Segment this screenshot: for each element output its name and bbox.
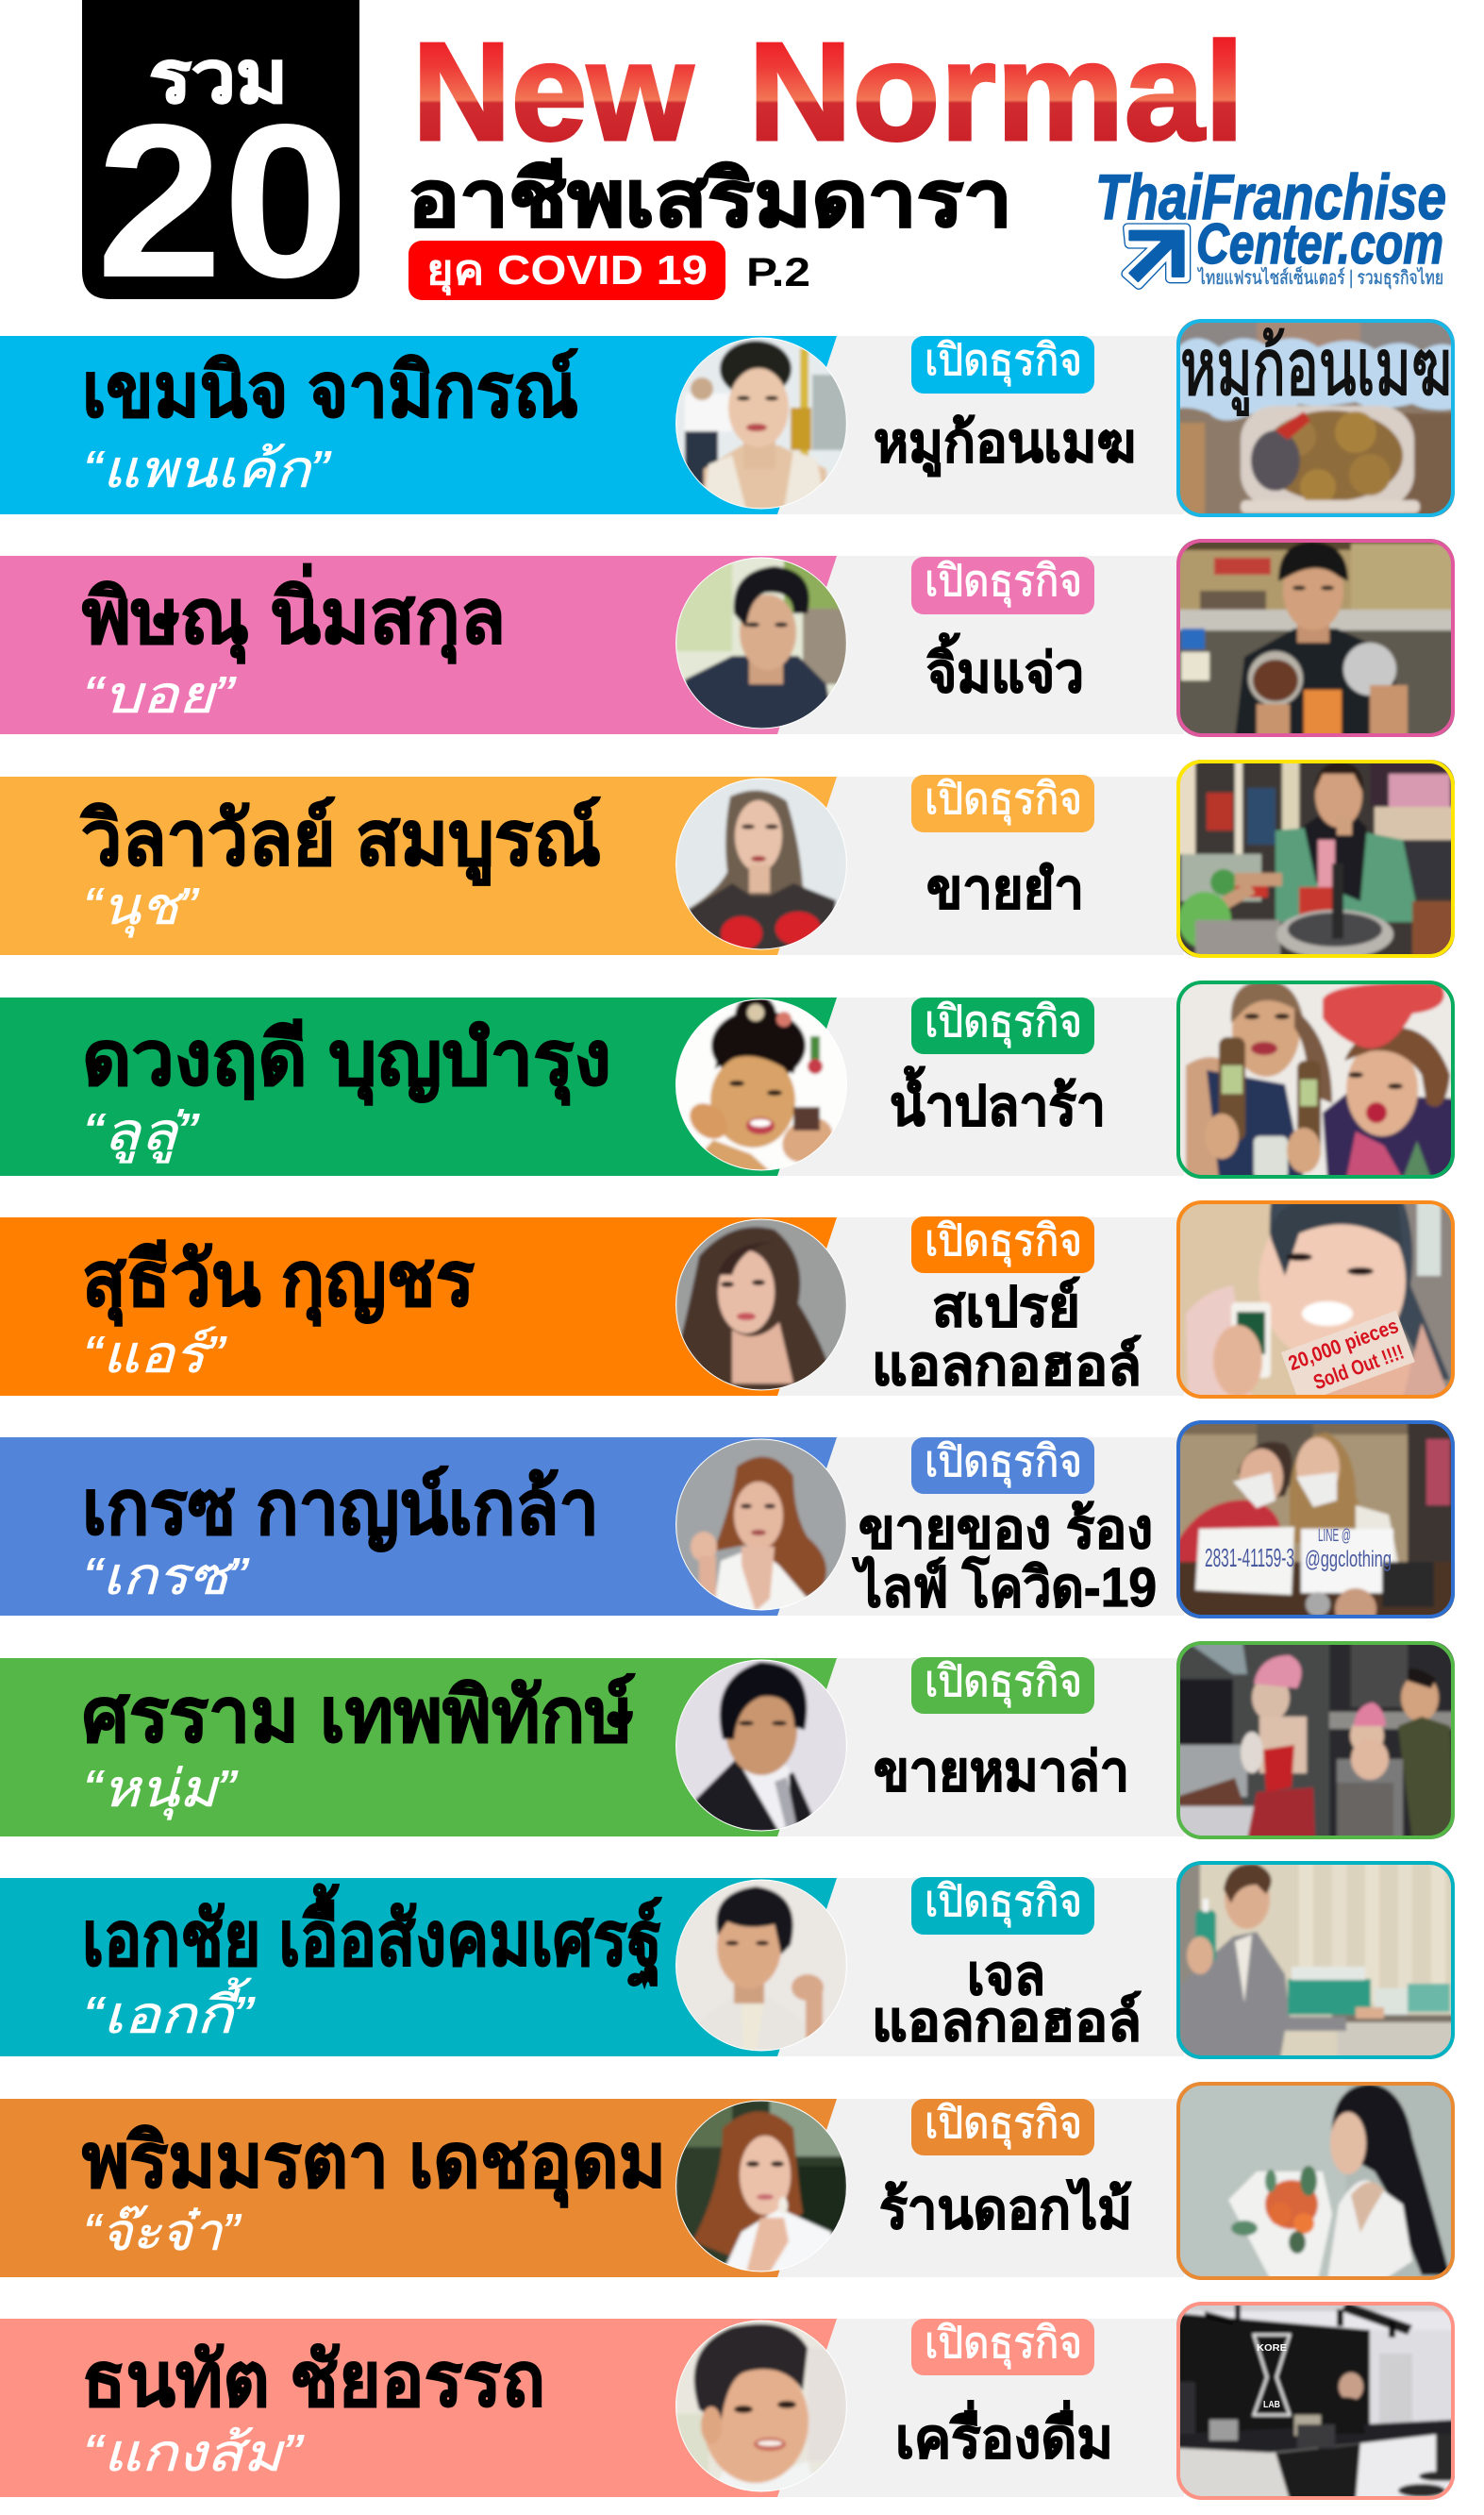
name: เกรซ กาญน์เกล้า [82,1466,599,1551]
portrait [675,1438,847,1611]
title: New Normal: Normal [748,14,1244,170]
nickname: “เกรซ” [83,1547,250,1605]
business: ไลฟ์ โควิด-19 [851,1554,1157,1618]
tag: ยุค COVID 19 [409,241,725,300]
banner [0,336,1184,514]
business: แอลกอฮอล์ [872,1990,1142,2053]
business: สเปรย์ [932,1276,1080,1338]
portrait [675,1879,847,2052]
row 1: แพนเค้ก [0,319,1455,517]
business: น้ำปลาร้า [890,1066,1106,1137]
name: เขมนิจ จามิกรณ์ [82,348,578,432]
nickname: “แกงส้ม” [83,2423,305,2482]
row 10: แกงส้ม [0,2302,1455,2500]
business: ร้านดอกไม้ [879,2178,1132,2240]
row 8: เอกกี้ [0,1861,1455,2059]
photo [1176,760,1455,959]
tag: เปิดธุรกิจ [925,1656,1082,1708]
banner [0,998,1184,1176]
count badge: รวม 20: 20 [96,79,349,324]
photo: LAB [1263,2400,1280,2410]
business [872,1276,1142,1397]
business: ขายยำ [926,859,1084,920]
portrait [675,1218,847,1391]
row 3: นุช [0,760,1455,959]
tag: เปิดธุรกิจ [925,774,1082,826]
photo [1176,2302,1455,2500]
name: ธนทัต ชัยอรรถ [82,2338,545,2422]
tag: เปิดธุรกิจ [925,2318,1082,2370]
nickname: “แอร์” [83,1325,227,1383]
row 7: หนุ่ม [0,1641,1455,1839]
nickname: “แพนเค้ก” [83,440,332,498]
nickname: “หนุ่ม” [83,1759,239,1820]
business [872,1945,1142,2053]
logo: ThaiFranchise Center.com [1095,161,1446,290]
photo [1176,2082,1455,2280]
photo [1176,1198,1455,1404]
tag: เปิดธุรกิจ [925,1876,1082,1928]
nickname: “ลูลู่” [83,1102,200,1164]
nickname: “จ๊ะจ๋า” [83,2203,242,2261]
photo [1176,1861,1455,2059]
business: เจล [967,1945,1045,2006]
count badge: รวม 20 [82,0,359,324]
photo [1176,981,1455,1179]
business: เครื่องดื่ม [895,2400,1113,2470]
tag: เปิดธุรกิจ [925,2098,1082,2150]
banner [0,1878,1184,2056]
business: ขายหมาล่า [874,1741,1129,1802]
business: จิ้มแจ่ว [926,633,1084,704]
subtitle: อาชีพเสริมดารา [408,157,1012,243]
banner [0,556,1184,734]
photo: @ggclothing [1305,1547,1392,1572]
tag: เปิดธุรกิจ [925,335,1082,387]
photo: 2831-41159-3 [1205,1543,1294,1572]
banner [0,1437,1184,1616]
photo [1176,1641,1455,1839]
portrait [675,2100,847,2272]
name: เอกชัย เอื้อสังคมเศรฐ์ [82,1884,662,1988]
banner [0,1658,1184,1836]
business: ขายของ ร้อง [859,1499,1153,1560]
tag: เปิดธุรกิจ [925,556,1082,608]
business [851,1499,1157,1618]
business: แอลกอฮอล์ [872,1334,1142,1397]
banner [0,777,1184,955]
tag: เปิดธุรกิจ [925,1216,1082,1267]
tag: ยุค COVID 19: ยุค COVID 19 [426,247,708,296]
photo: KORE [1257,2343,1287,2354]
portrait [675,1659,847,1832]
name: ศรราม เทพพิทักษ์ [82,1673,636,1757]
photo [1176,1420,1455,1630]
row 6: เกรซ [0,1420,1455,1630]
nickname: “บอย” [83,665,237,724]
name: พริมมรตา เดชอุดม [82,2119,666,2208]
row 4: ลูลู่ [0,981,1455,1179]
photo: Sold Out !!!! [1310,1340,1407,1394]
name: วิลาวัลย์ สมบูรณ์ [80,796,601,886]
count badge: รวม 20: รวม [149,38,288,118]
banner [0,2319,1184,2497]
page label: P.2 [746,250,810,295]
nickname: “นุช” [83,877,200,938]
row 5: แอร์ [0,1198,1455,1404]
name: สุธีวัน กุญชร [82,1237,475,1327]
tag: เปิดธุรกิจ [925,997,1082,1048]
portrait [675,557,847,729]
nickname: “เอกกี้” [83,1977,256,2044]
tag: เปิดธุรกิจ [925,1436,1082,1488]
row 2: บอย [0,539,1455,737]
name: ดวงฤดี บุญบำรุง [82,1016,611,1106]
business: หมูก้อนเมฆ [874,412,1136,477]
title: New Normal: New [412,14,694,170]
portrait [675,337,847,510]
banner [0,1217,1184,1396]
row 9: จ๊ะจ๋า [0,2082,1455,2280]
header [82,0,1446,324]
photo: LINE @ [1318,1526,1351,1545]
portrait [675,2320,847,2492]
photo [1176,539,1455,737]
photo: 20,000 pieces [1285,1314,1401,1375]
portrait [675,778,847,950]
photo [1176,319,1455,517]
portrait [675,995,847,1171]
title: New Normal [412,14,1244,170]
banner [0,2099,1184,2277]
name: พิษณุ นิ่มสกุล [82,563,506,664]
